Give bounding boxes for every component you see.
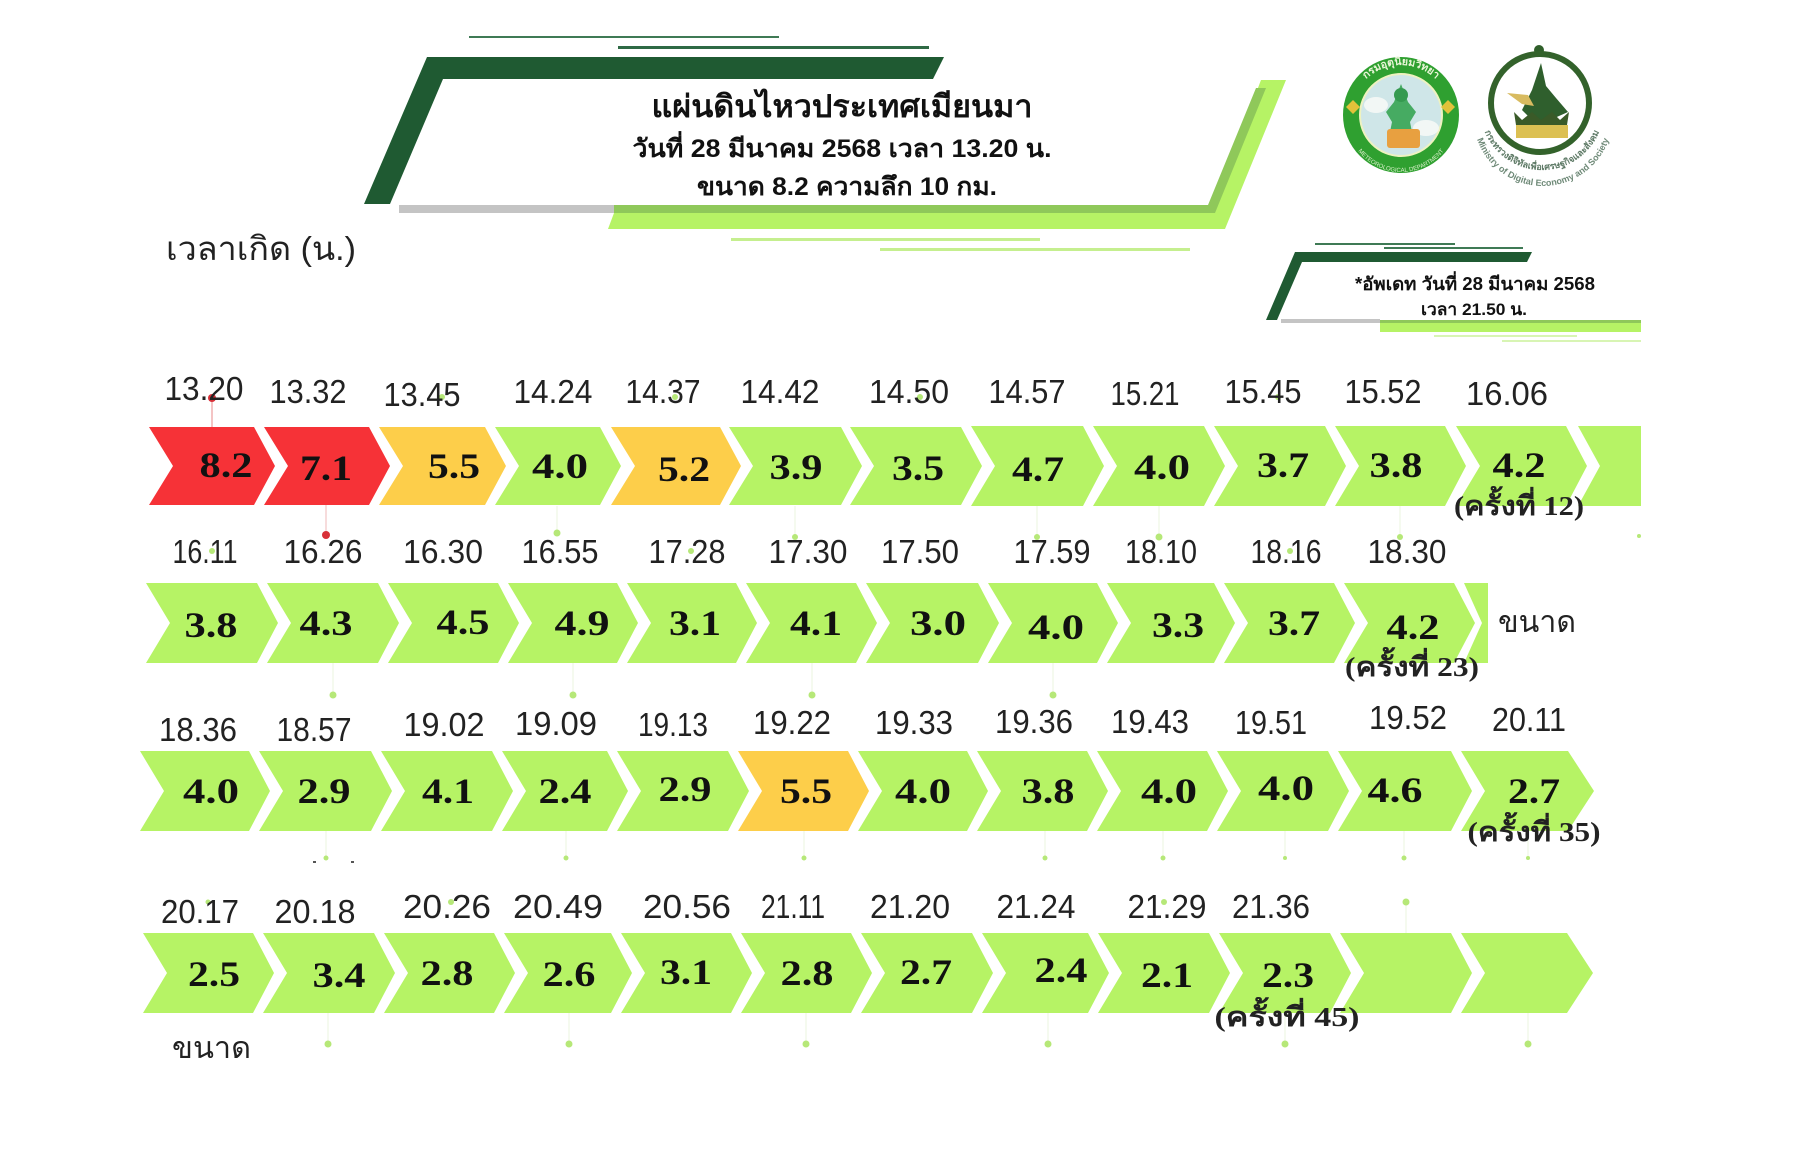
quake 19.22 magnitude 5.5: 5.5 [780, 771, 832, 811]
quake 18.57 magnitude 2.9 [259, 711, 392, 831]
quake 16.30 magnitude 4.5 [388, 533, 519, 663]
quake 13.45 magnitude 5.5: 13.45 [384, 376, 460, 413]
quake 15.21 magnitude 4.0: 4.0 [1134, 447, 1190, 487]
quake 19.51 magnitude 4.0: 4.0 [1258, 768, 1314, 808]
quake 20.56 magnitude 3.1: 20.56 [643, 888, 731, 925]
quake 16.26 magnitude 4.3: 4.3 [300, 603, 352, 643]
quake 19.43 magnitude 4.0 [1097, 703, 1228, 831]
quake 21.11 magnitude 2.8 [741, 888, 872, 1013]
axis label: magnitude right: ขนาด [1498, 606, 1576, 639]
quake 17.30 magnitude 4.1: 17.30 [768, 533, 848, 570]
count label 12: (ครั้งที่ 12) [1454, 485, 1584, 521]
quake 14.42 magnitude 3.9 [729, 373, 862, 505]
quake 19.13 magnitude 2.9: 2.9 [658, 769, 712, 809]
quake 16.30 magnitude 4.5: 4.5 [436, 602, 490, 642]
count label 23: (ครั้งที่ 23) [1345, 646, 1479, 682]
quake 18.10 magnitude 3.3: 3.3 [1152, 605, 1204, 645]
quake 20.56 magnitude 3.1: 3.1 [660, 952, 712, 992]
quake 14.57 magnitude 4.7 [971, 373, 1104, 506]
quake 20.26 magnitude 2.8 [384, 888, 515, 1013]
quake 18.36 magnitude 4.0: 4.0 [183, 771, 239, 811]
quake 20.18 magnitude 3.4 [263, 893, 395, 1013]
quake 14.24 magnitude 4.0: 4.0 [532, 446, 588, 486]
quake 19.09 magnitude 2.4 [502, 705, 628, 831]
quake 17.30 magnitude 4.1 [746, 533, 877, 663]
quake 19.33 magnitude 4.0 [858, 704, 988, 831]
quake 19.22 magnitude 5.5: 19.22 [753, 704, 831, 741]
quake 20.18 magnitude 3.4: 3.4 [312, 955, 366, 995]
quake 19.51 magnitude 4.0: 19.51 [1235, 704, 1307, 741]
quake 18.10 magnitude 3.3 [1107, 533, 1235, 663]
quake 18.16 magnitude 3.7: 18.16 [1250, 533, 1322, 570]
quake 18.57 magnitude 2.9: 2.9 [298, 771, 350, 811]
quake 15.52 magnitude 3.8: 15.52 [1344, 373, 1422, 410]
logo: meteorological department: กรมอุตุนิยมวิทยา [1363, 56, 1439, 79]
row 3: earthquakes 24 to 35 [140, 699, 1600, 847]
quake 21.36 magnitude 2.3: 2.3 [1262, 955, 1314, 995]
quake 18.36 magnitude 4.0 [140, 711, 270, 831]
quake 19.13 magnitude 2.9 [617, 706, 749, 831]
count label 35: (ครั้งที่ 35) [1468, 811, 1600, 847]
quake 20.49 magnitude 2.6 [504, 888, 632, 1013]
quake 19.09 magnitude 2.4: 2.4 [538, 771, 592, 811]
quake 18.36 magnitude 4.0: 18.36 [159, 711, 237, 748]
quake 16.06 magnitude 4.2: 16.06 [1466, 375, 1548, 412]
quake 13.32 magnitude 7.1: 7.1 [300, 448, 352, 488]
quake 20.18 magnitude 3.4: 20.18 [274, 893, 356, 930]
logo: ministry of digital economy and society: Ministry of Digital Economy and Society [1477, 138, 1610, 186]
quake 21.36 magnitude 2.3: 21.36 [1232, 888, 1310, 925]
quake 16.06 magnitude 4.2 [1456, 375, 1587, 506]
quake 14.42 magnitude 3.9: 3.9 [770, 447, 822, 487]
quake 15.52 magnitude 3.8: 3.8 [1370, 445, 1422, 485]
quake 19.52 magnitude 4.6: 19.52 [1369, 699, 1447, 736]
axis label: magnitude bottom: ขนาด [172, 1032, 251, 1065]
quake 21.20 magnitude 2.7: 21.20 [870, 888, 950, 925]
quake 20.49 magnitude 2.6: 2.6 [542, 954, 596, 994]
quake 14.50 magnitude 3.5: 3.5 [892, 448, 944, 488]
quake 16.06 magnitude 4.2: 4.2 [1492, 445, 1546, 485]
quake 18.16 magnitude 3.7 [1224, 533, 1355, 663]
quake 21.29 magnitude 2.1: 21.29 [1128, 888, 1206, 925]
quake 14.37 magnitude 5.2: 5.2 [658, 449, 710, 489]
quake 20.11 magnitude 2.7 [1461, 701, 1594, 831]
magnitude and depth line: ขนาด 8.2 ความลึก 10 กม. [697, 173, 997, 201]
quake 21.11 magnitude 2.8: 2.8 [780, 953, 834, 993]
empty chevron 12 [1461, 933, 1593, 1013]
logo: ministry of digital economy and society [1477, 45, 1610, 186]
quake 13.32 magnitude 7.1 [264, 373, 390, 505]
quake 14.37 magnitude 5.2 [611, 373, 741, 505]
quake 19.36 magnitude 3.8: 3.8 [1022, 771, 1074, 811]
quake 19.52 magnitude 4.6: 4.6 [1368, 770, 1422, 810]
update note box [1266, 243, 1641, 342]
quake 15.52 magnitude 3.8 [1335, 373, 1466, 506]
quake 17.50 magnitude 3.0: 3.0 [910, 603, 966, 643]
quake 21.29 magnitude 2.1 [1098, 888, 1230, 1013]
row 2: earthquakes 13 to 23 [146, 533, 1488, 682]
quake 17.28 magnitude 3.1 [627, 533, 757, 663]
quake 13.20 magnitude 8.2: 8.2 [200, 445, 252, 485]
quake 17.59 magnitude 4.0: 17.59 [1014, 533, 1090, 570]
quake 13.32 magnitude 7.1: 13.32 [270, 373, 346, 410]
quake 16.30 magnitude 4.5: 16.30 [403, 533, 483, 570]
update date text: *อัพเดท วันที่ 28 มีนาคม 2568 [1355, 271, 1595, 294]
quake 20.26 magnitude 2.8: 2.8 [420, 953, 474, 993]
quake 19.02 magnitude 4.1: 4.1 [422, 771, 474, 811]
quake 14.24 magnitude 4.0 [495, 373, 621, 505]
quake 17.59 magnitude 4.0 [988, 533, 1118, 663]
date and time line: วันที่ 28 มีนาคม 2568 เวลา 13.20 น. [632, 131, 1052, 163]
quake 16.26 magnitude 4.3: 16.26 [284, 533, 362, 570]
quake 15.21 magnitude 4.0: 15.21 [1110, 375, 1180, 412]
quake 21.24 magnitude 2.4: 2.4 [1034, 950, 1088, 990]
quake 15.45 magnitude 3.7: 15.45 [1224, 373, 1302, 410]
quake 20.26 magnitude 2.8: 20.26 [403, 888, 491, 925]
quake 13.45 magnitude 5.5: 5.5 [428, 446, 480, 486]
quake 19.22 magnitude 5.5 [738, 704, 869, 831]
quake 19.02 magnitude 4.1: 19.02 [404, 706, 484, 743]
quake 19.02 magnitude 4.1 [381, 706, 513, 831]
quake 17.28 magnitude 3.1: 3.1 [669, 603, 721, 643]
title: แผ่นดินไหวประเทศเมียนมา [652, 88, 1032, 124]
quake 14.50 magnitude 3.5: 14.50 [869, 373, 949, 410]
quake 21.20 magnitude 2.7 [861, 888, 993, 1013]
quake 19.43 magnitude 4.0: 19.43 [1111, 703, 1189, 740]
quake 14.57 magnitude 4.7: 14.57 [988, 373, 1066, 410]
quake 15.45 magnitude 3.7 [1214, 373, 1346, 506]
quake 18.30 magnitude 4.2 [1344, 533, 1475, 663]
quake 21.29 magnitude 2.1: 2.1 [1141, 955, 1193, 995]
quake 19.13 magnitude 2.9: 19.13 [638, 706, 708, 743]
quake 13.20 magnitude 8.2: 13.20 [164, 370, 244, 407]
quake 16.11 magnitude 3.8: 16.11 [172, 533, 238, 570]
quake 19.51 magnitude 4.0 [1217, 704, 1349, 831]
row 2 tail arrow [1464, 583, 1488, 663]
quake 21.20 magnitude 2.7: 2.7 [900, 952, 952, 992]
quake 16.11 magnitude 3.8: 3.8 [184, 605, 238, 645]
quake 21.24 magnitude 2.4 [982, 888, 1109, 1013]
update time text: เวลา 21.50 น. [1421, 300, 1527, 319]
quake 18.30 magnitude 4.2: 18.30 [1368, 533, 1446, 570]
quake 20.17 magnitude 2.5: 20.17 [161, 893, 239, 930]
quake 13.20 magnitude 8.2 [149, 370, 275, 505]
quake 20.17 magnitude 2.5 [143, 893, 274, 1013]
quake 14.57 magnitude 4.7: 4.7 [1012, 449, 1064, 489]
quake 21.36 magnitude 2.3 [1219, 888, 1351, 1013]
logo: meteorological department [1343, 56, 1459, 173]
quake 16.55 magnitude 4.9: 16.55 [522, 533, 598, 570]
empty chevron 11 [1340, 933, 1472, 1013]
quake 19.36 magnitude 3.8: 19.36 [995, 703, 1073, 740]
quake 16.11 magnitude 3.8 [146, 533, 278, 663]
row 1 tail arrow [1578, 426, 1641, 506]
quake 17.30 magnitude 4.1: 4.1 [790, 603, 842, 643]
header banner [364, 36, 1286, 251]
timeline stems and dots [206, 394, 1641, 1048]
axis label: time of occurrence: เวลาเกิด (น.) [166, 230, 356, 267]
quake 20.11 magnitude 2.7: 2.7 [1508, 771, 1560, 811]
quake 21.24 magnitude 2.4: 21.24 [996, 888, 1076, 925]
quake 16.26 magnitude 4.3 [267, 533, 399, 663]
quake 21.11 magnitude 2.8: 21.11 [761, 888, 825, 925]
quake 18.57 magnitude 2.9: 18.57 [276, 711, 352, 748]
quake 19.36 magnitude 3.8 [977, 703, 1108, 831]
quake 16.55 magnitude 4.9 [508, 533, 638, 663]
quake 17.28 magnitude 3.1: 17.28 [648, 533, 726, 570]
quake 20.11 magnitude 2.7: 20.11 [1492, 701, 1566, 738]
quake 15.21 magnitude 4.0 [1093, 375, 1225, 506]
quake 19.33 magnitude 4.0: 4.0 [895, 771, 951, 811]
quake 20.56 magnitude 3.1 [621, 888, 752, 1013]
quake 17.59 magnitude 4.0: 4.0 [1028, 607, 1084, 647]
quake 19.43 magnitude 4.0: 4.0 [1141, 771, 1197, 811]
quake 20.17 magnitude 2.5: 2.5 [188, 954, 240, 994]
logo: meteorological department: METEOROLOGICAL DEPARTMENT [1358, 148, 1443, 172]
quake 14.37 magnitude 5.2: 14.37 [626, 373, 700, 410]
quake 18.16 magnitude 3.7: 3.7 [1268, 603, 1320, 643]
quake 19.52 magnitude 4.6 [1338, 699, 1472, 831]
count label 45: (ครั้งที่ 45) [1214, 996, 1360, 1032]
quake 15.45 magnitude 3.7: 3.7 [1257, 445, 1309, 485]
logo: ministry of digital economy and society: กระทรวงดิจิทัลเพื่อเศรษฐกิจและสังคม [1484, 130, 1600, 170]
row 4: earthquakes 36 to 45 [143, 888, 1593, 1032]
quake 19.33 magnitude 4.0: 19.33 [875, 704, 953, 741]
quake 17.50 magnitude 3.0 [866, 533, 999, 663]
quake 16.55 magnitude 4.9: 4.9 [554, 603, 610, 643]
row 1: earthquakes 1 to 12 [149, 370, 1641, 521]
quake 18.10 magnitude 3.3: 18.10 [1125, 533, 1197, 570]
quake 14.24 magnitude 4.0: 14.24 [514, 373, 592, 410]
quake 20.49 magnitude 2.6: 20.49 [513, 888, 603, 925]
quake 14.50 magnitude 3.5 [850, 373, 982, 505]
quake 13.45 magnitude 5.5 [379, 376, 506, 505]
quake 17.50 magnitude 3.0: 17.50 [881, 533, 959, 570]
quake 14.42 magnitude 3.9: 14.42 [740, 373, 820, 410]
quake 18.30 magnitude 4.2: 4.2 [1386, 607, 1440, 647]
quake 19.09 magnitude 2.4: 19.09 [515, 705, 597, 742]
